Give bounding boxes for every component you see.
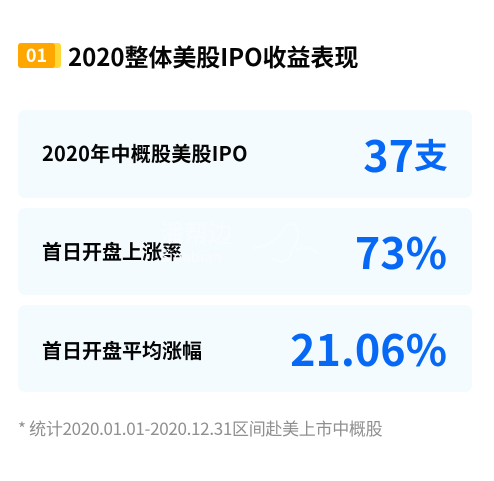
panel: first-day average rise — [18, 305, 472, 392]
footnote: * 统计2020.01.01-2020.12.31区间赴美上市中概股 — [18, 415, 382, 440]
watermark: Sinabian — [160, 246, 222, 267]
value: 21.06%: 21.06% — [290, 316, 447, 378]
watermark — [160, 214, 232, 267]
watermark: 潘帮边 — [160, 214, 232, 249]
section badge: 01 — [18, 42, 61, 68]
value: 73%: 73% — [355, 220, 447, 282]
label: average rise: 首日开盘平均涨幅 — [42, 334, 202, 364]
value: 37: 支 — [414, 129, 448, 178]
section badge: 01: 01 — [26, 42, 47, 68]
panel: first-day opening rise rate — [18, 208, 472, 295]
value: 37 — [363, 123, 448, 185]
panel: 2020 China concept stock IPO count — [18, 110, 472, 198]
label: IPO count: 2020年中概股美股IPO — [42, 138, 248, 167]
value: 37: 37 — [363, 123, 414, 185]
label: rise rate: 首日开盘上涨率 — [42, 236, 182, 265]
title: 2020整体美股IPO收益表现 — [68, 38, 358, 73]
